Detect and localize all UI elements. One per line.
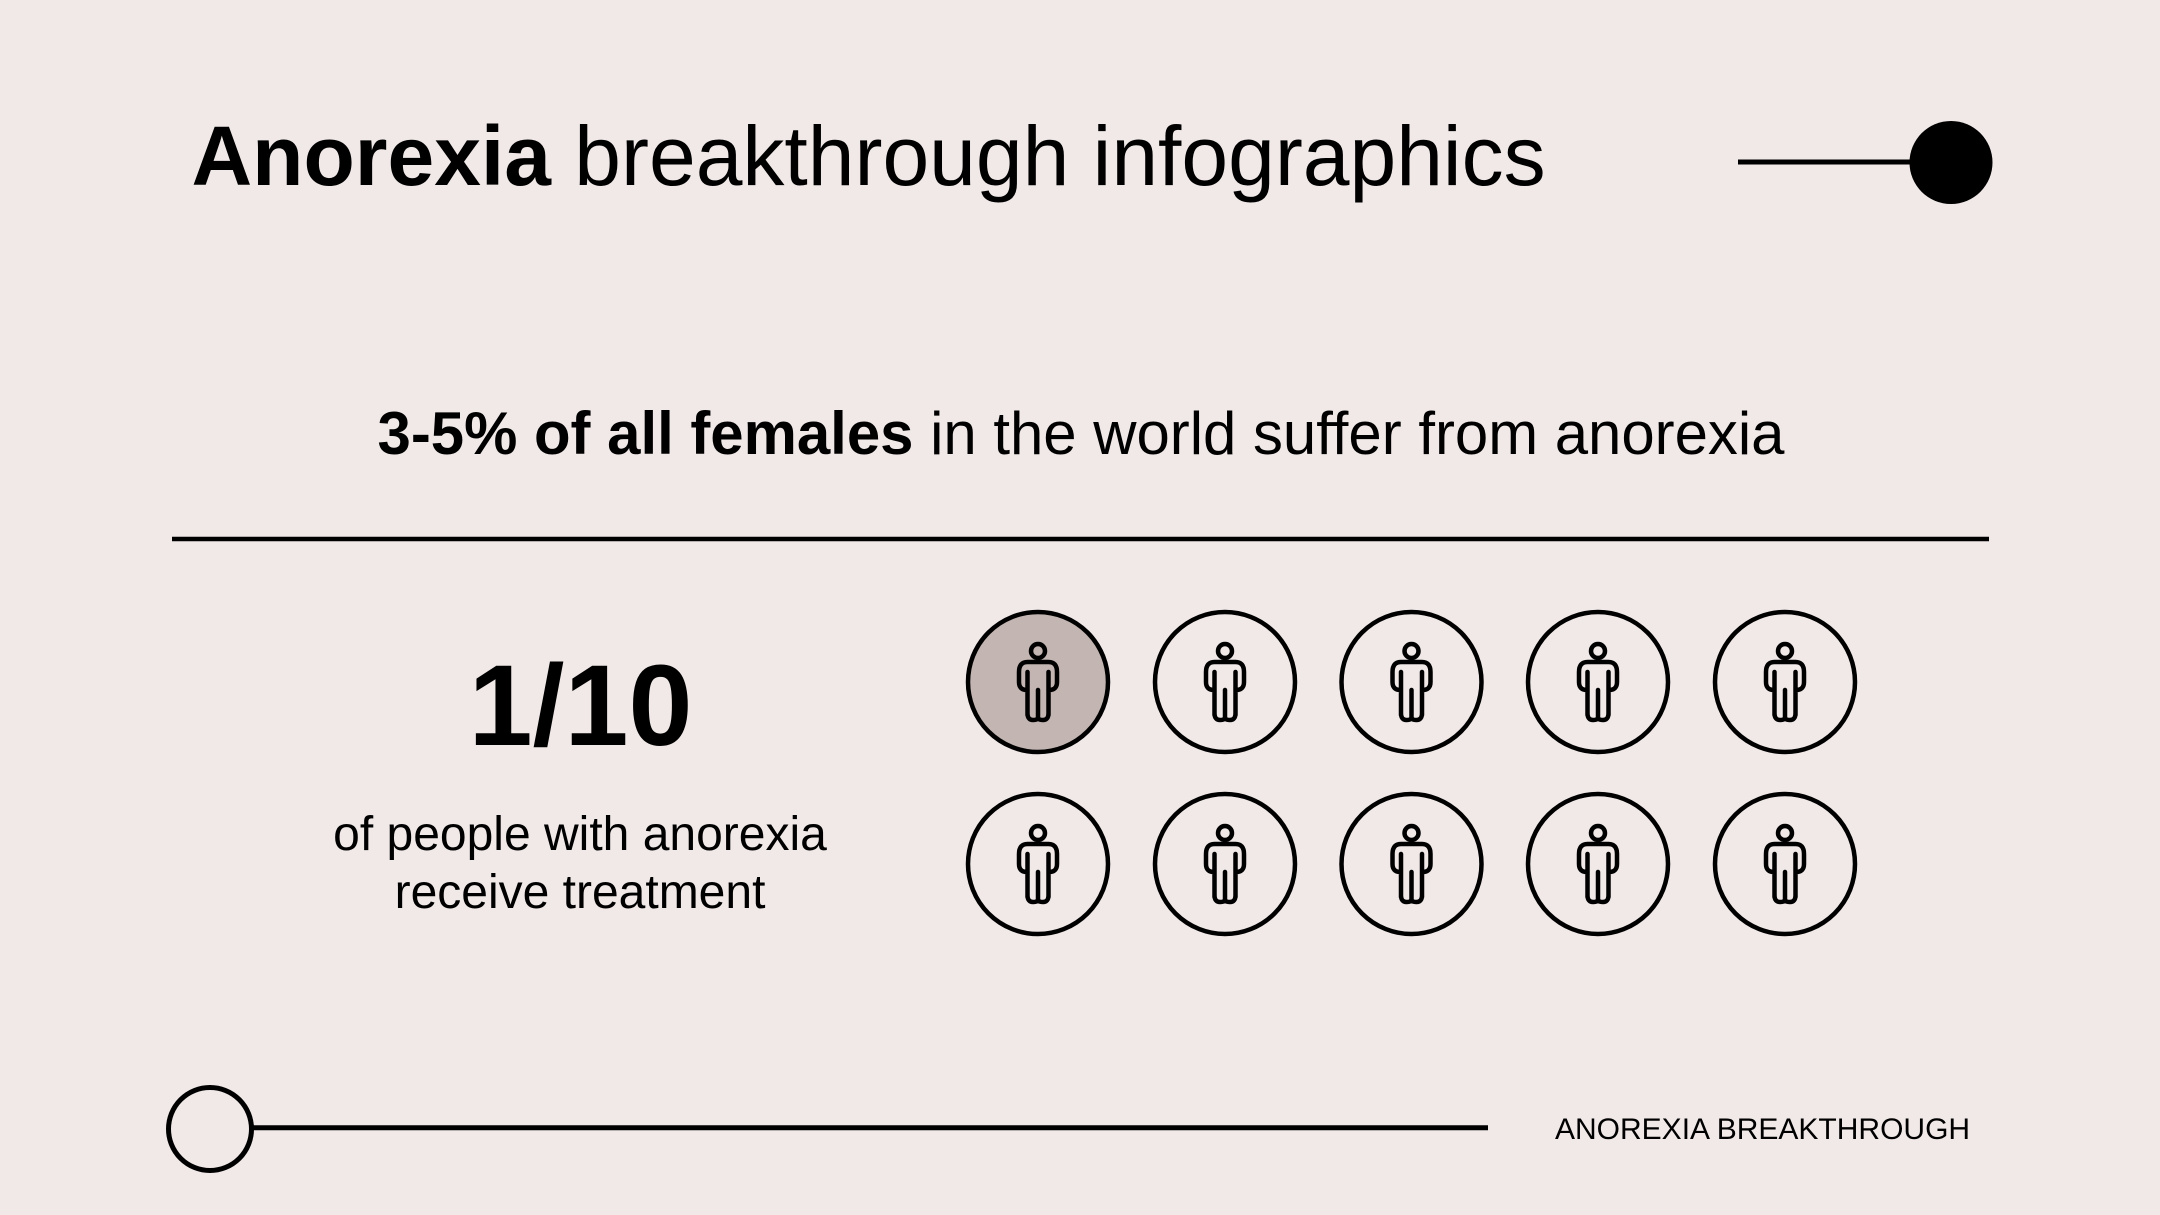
person 10 bbox=[1715, 794, 1855, 934]
person 8 bbox=[1342, 794, 1482, 934]
footer label: ANOREXIA BREAKTHROUGH bbox=[1555, 1113, 1970, 1146]
footer line with open circle bbox=[168, 1088, 1488, 1170]
pictogram: 1 of 10 people highlighted bbox=[968, 612, 1855, 934]
person 1 highlighted bbox=[968, 612, 1108, 752]
top-right line with filled circle bbox=[1738, 121, 1992, 204]
big number: 1/10 bbox=[469, 642, 692, 770]
person 6 bbox=[968, 794, 1108, 934]
person 5 bbox=[1715, 612, 1855, 752]
description: receive treatment bbox=[395, 866, 765, 919]
subtitle statistic: 3-5% of all females in the world suffer from anorexia bbox=[378, 400, 1784, 467]
person 7 bbox=[1155, 794, 1295, 934]
person 4 bbox=[1528, 612, 1668, 752]
person 3 bbox=[1342, 612, 1482, 752]
person 2 bbox=[1155, 612, 1295, 752]
description bbox=[333, 808, 827, 919]
title: Anorexia breakthrough infographics bbox=[192, 109, 1546, 203]
description: of people with anorexia bbox=[333, 808, 827, 861]
person 9 bbox=[1528, 794, 1668, 934]
